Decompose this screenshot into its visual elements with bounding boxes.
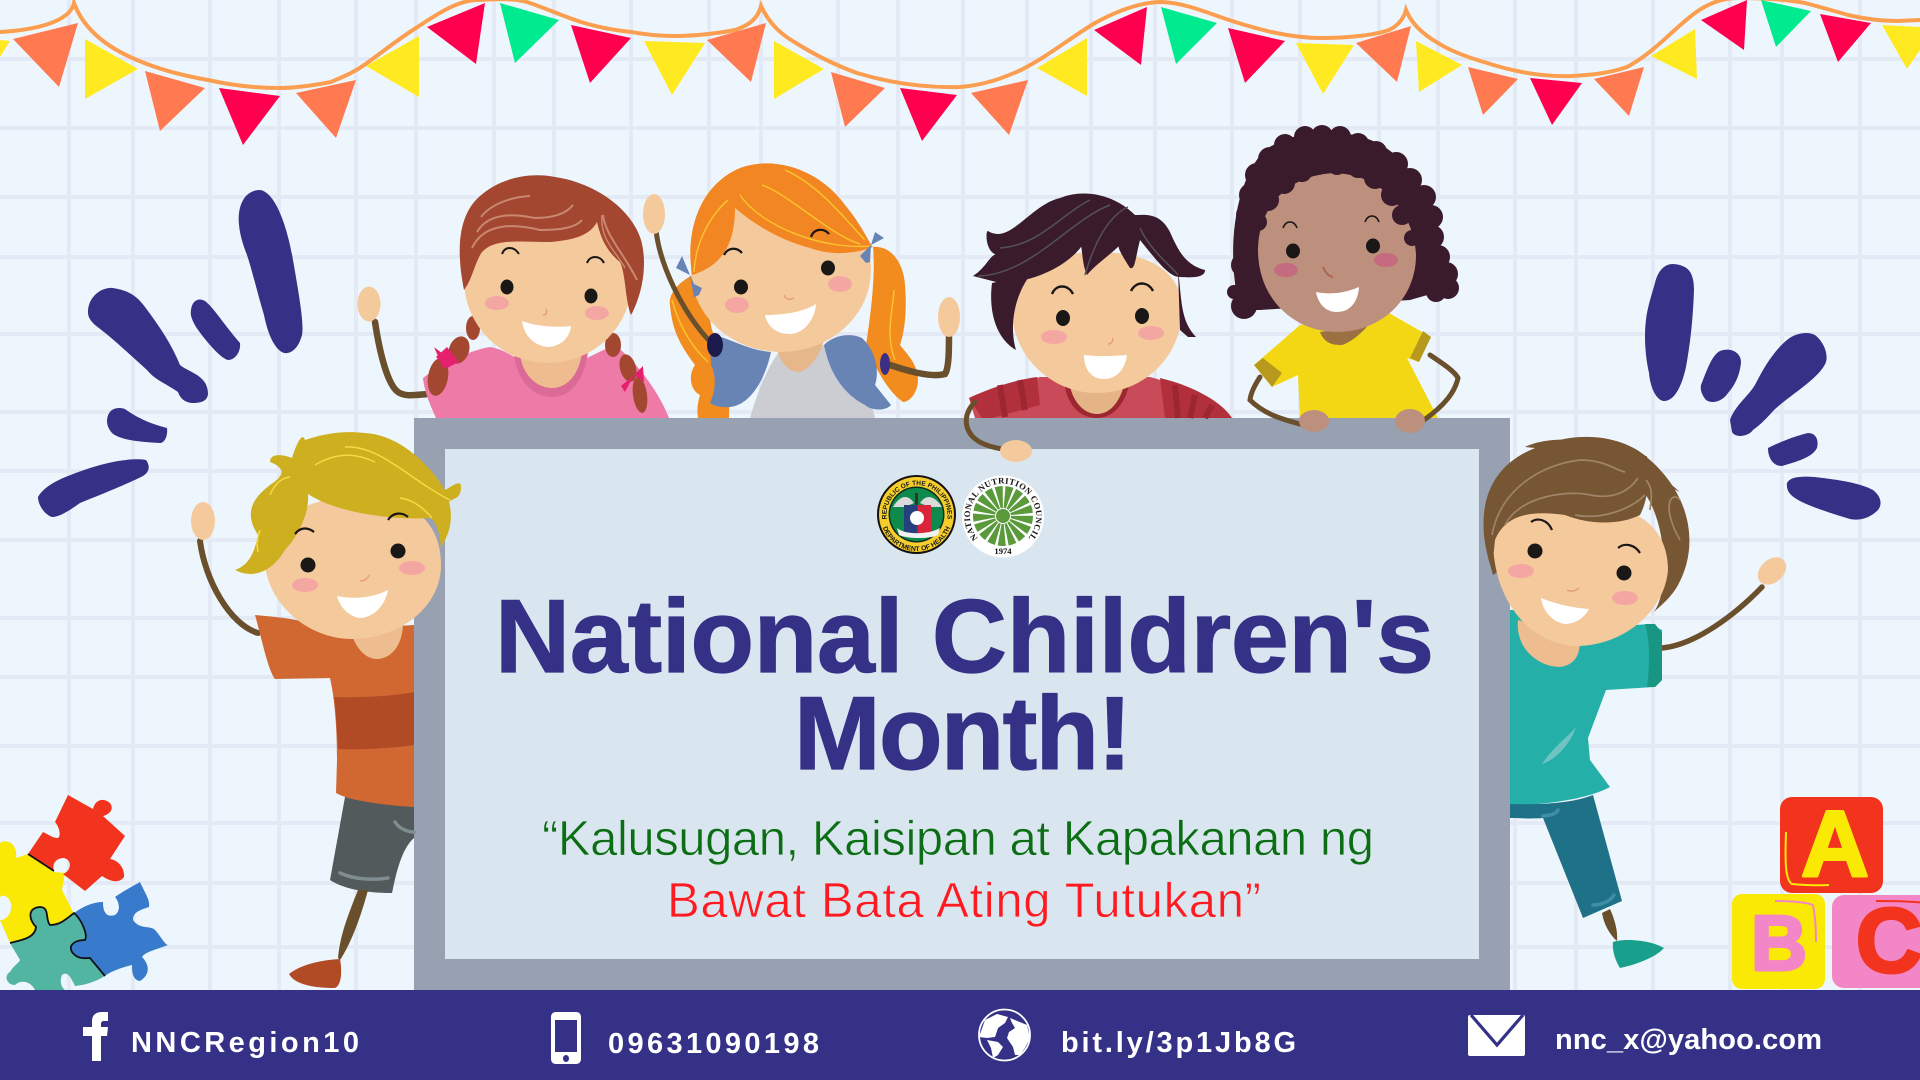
subtitle: slogan: “Kalusugan, Kaisipan at Kapakanan ng — [542, 812, 1374, 866]
title — [495, 579, 1434, 792]
subtitle: slogan: Bawat Bata Ating Tutukan” — [667, 874, 1261, 928]
footer item: phone — [551, 1012, 819, 1064]
icon: navy burst marks left — [38, 190, 303, 517]
footer item: email: nnc_x@yahoo.com — [1555, 1024, 1822, 1056]
character: brown-haired boy right — [1483, 437, 1792, 968]
panel: sign board — [414, 418, 1510, 990]
icon: navy burst marks right — [1645, 264, 1881, 520]
footer item: email — [1468, 1015, 1822, 1056]
character: blond boy left — [191, 432, 461, 988]
character: girl with brown braids — [358, 175, 669, 418]
footer item: phone: 09631090198 — [608, 1028, 819, 1060]
bunting: string of flags — [0, 0, 1920, 145]
title: Month! — [794, 676, 1132, 792]
icon: mobile phone — [551, 1012, 581, 1064]
icon: facebook f — [83, 1012, 108, 1061]
icon: Department of Health seal — [877, 475, 956, 554]
footer item: Facebook — [83, 1012, 359, 1061]
icon: National Nutrition Council seal: NATIONAL NUTRITION COUNCIL — [964, 478, 1042, 542]
footer item: website: bit.ly/3p1Jb8G — [1061, 1027, 1296, 1059]
icon: envelope — [1468, 1015, 1525, 1056]
character: boy with dark hair — [966, 193, 1232, 462]
icon: ABC toy blocks — [1732, 791, 1920, 992]
icon: National Nutrition Council seal: 1974 — [994, 546, 1012, 556]
subtitle: slogan — [542, 812, 1374, 928]
footer item: Facebook: NNCRegion10 — [131, 1027, 359, 1059]
icon: Department of Health seal: REPUBLIC OF THE PHILIPPINES — [882, 480, 952, 519]
character: girl with orange pigtails — [643, 163, 960, 418]
footer item: website — [979, 1010, 1296, 1060]
character: girl with dark curly hair — [1227, 125, 1459, 433]
icon: ABC toy blocks: B — [1751, 899, 1807, 987]
icon: ABC toy blocks: A — [1801, 791, 1869, 896]
title: National Children's — [495, 579, 1434, 695]
icon: jigsaw puzzle pieces — [0, 795, 168, 990]
icon: globe — [979, 1010, 1030, 1060]
footer bar — [0, 990, 1920, 1080]
icon: Department of Health seal: DEPARTMENT OF HEALTH — [883, 526, 950, 552]
